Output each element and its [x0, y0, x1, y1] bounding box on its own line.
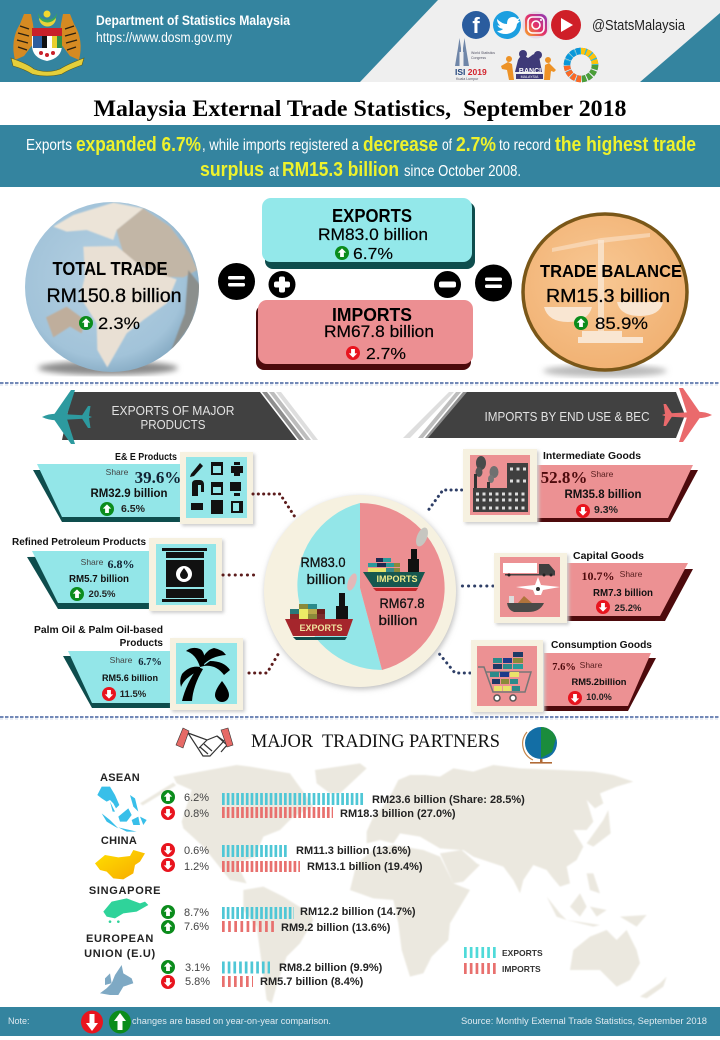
- banner text: at: [269, 163, 280, 180]
- partner: European Union: 5.8%: [185, 976, 210, 988]
- icon: export ship: [285, 572, 359, 640]
- pie label exports unit: billion: [306, 571, 346, 587]
- panel: consumption goods: 10.0%: [586, 692, 612, 702]
- background world map: [140, 763, 667, 1003]
- panel: capital goods: [494, 551, 693, 625]
- connector: intermediate dots: [427, 490, 467, 512]
- exports box: RM83.0 billion: [318, 225, 428, 244]
- banner text: [26, 134, 696, 181]
- panel: intermediate goods: 52.8%: [541, 468, 587, 487]
- panel: capital goods: 25.2%: [615, 603, 642, 614]
- chart: trade pie: [264, 495, 457, 689]
- logo: ISI 2019: Kuala Lumpur: [456, 77, 479, 81]
- legend: EXPORTS: [502, 948, 543, 958]
- exports header ribbon: EXPORTS OF MAJOR: [112, 404, 234, 418]
- panel: refined petroleum: Refined Petroleum Products: [12, 537, 146, 548]
- banner text: surplus: [200, 159, 264, 181]
- logo: SDG wheel: [567, 51, 595, 79]
- icon: truck, plane and ship: [494, 553, 569, 625]
- icon: facebook: [462, 11, 490, 39]
- total trade globe: [25, 202, 202, 375]
- imports header ribbon: [403, 388, 712, 442]
- icon: import ship: [363, 526, 430, 591]
- icon: balance scale: [544, 233, 663, 343]
- imports box: RM67.8 billion: [324, 322, 434, 341]
- exports box: EXPORTS: [332, 206, 412, 226]
- partner: Singapore: 7.6%: [184, 921, 209, 933]
- panel: intermediate goods: [463, 449, 698, 524]
- footer: [0, 1007, 720, 1036]
- panel: palm oil: Share: [110, 655, 133, 665]
- social handle: @StatsMalaysia: [592, 17, 686, 34]
- footer: Note:: [8, 1016, 30, 1026]
- icon: Singapore map: [103, 898, 148, 923]
- panel: refined petroleum: 20.5%: [89, 589, 116, 600]
- partner: ASEAN: 0.8%: [184, 808, 209, 820]
- partner: Singapore: [89, 885, 416, 934]
- icon: coat of arms: [11, 10, 84, 76]
- panel: palm oil: 6.7%: [138, 657, 162, 668]
- panel: intermediate goods: 9.3%: [594, 504, 619, 516]
- header band: [0, 0, 720, 82]
- section heading: major trading partners: MAJOR TRADING PARTNERS: [251, 731, 500, 752]
- operator: plus: [268, 271, 296, 298]
- panel: intermediate goods: Intermediate Goods: [543, 451, 641, 462]
- panel: E&E products: 6.5%: [121, 503, 146, 515]
- icon: instagram: [522, 12, 550, 38]
- panel: E&E products: 39.6%: [135, 468, 181, 487]
- icon: electronics grid: [180, 452, 255, 526]
- operator: minus: [434, 271, 461, 298]
- panel: palm oil: [34, 625, 245, 712]
- imports box: 2.7%: [366, 346, 406, 363]
- panel: capital goods: 10.7%: [582, 569, 614, 583]
- banner text: Exports: [26, 137, 72, 154]
- connector: consumption dots: [437, 651, 470, 673]
- logo: Banci Malaysia: BANCI: [519, 68, 541, 75]
- panel: consumption goods: [471, 640, 656, 714]
- trade balance circle: [523, 214, 687, 377]
- panel: consumption goods: RM5.2billion: [572, 677, 627, 688]
- panel: refined petroleum: [12, 537, 224, 613]
- panel: refined petroleum: RM5.7 billion: [69, 574, 129, 585]
- legend: IMPORTS: [502, 964, 541, 974]
- banner text: , while imports registered a: [202, 137, 359, 154]
- partner: European Union: 3.1%: [185, 962, 210, 974]
- partner: ASEAN: 6.2%: [184, 792, 209, 804]
- pie label exports: RM83.0: [300, 554, 346, 570]
- connector: petroleum dots: [223, 574, 257, 576]
- total trade text: RM150.8 billion: [46, 286, 182, 307]
- panel: E&E products: Share: [106, 467, 129, 477]
- panel: consumption goods: Consumption Goods: [551, 640, 652, 651]
- trade balance circle: RM15.3 billion: [546, 286, 670, 306]
- department name: Department of Statistics Malaysia: [96, 13, 290, 28]
- logo: ISI 2019: ISI 2019: [455, 67, 487, 77]
- footer: Source: Monthly External Trade Statistics, September 2018: [461, 1016, 707, 1026]
- logo: ISI 2019: World Statistics: [471, 51, 495, 55]
- panel: intermediate goods: RM35.8 billion: [564, 487, 642, 501]
- operator: equals right: [475, 264, 512, 302]
- partner: European Union: [84, 933, 383, 995]
- partner: ASEAN: [97, 772, 525, 832]
- partner: ASEAN: RM23.6 billion (Share: 28.5%): [372, 794, 525, 806]
- pie label imports unit: billion: [378, 612, 418, 628]
- panel: consumption goods: Share: [580, 660, 603, 670]
- panel: capital goods: RM7.3 billion: [593, 588, 653, 599]
- icon: factory: [463, 449, 539, 524]
- banner text: the highest trade: [555, 134, 696, 156]
- icon: red plane: [662, 388, 712, 442]
- partner: Singapore: SINGAPORE: [89, 885, 161, 897]
- exports box: 6.7%: [353, 246, 393, 263]
- icon: oil palm: [170, 638, 245, 712]
- partner: China: CHINA: [101, 835, 137, 847]
- total trade text: 2.3%: [98, 314, 140, 333]
- icon: teal plane: [42, 390, 92, 444]
- headline banner: [0, 125, 720, 187]
- panel: capital goods: Capital Goods: [573, 551, 644, 562]
- total trade text: [46, 259, 182, 333]
- icon: export ship: EXPORTS: [299, 623, 343, 633]
- partner: China: [95, 835, 423, 879]
- partner: European Union: UNION (E.U): [84, 948, 156, 960]
- panel: palm oil: RM5.6 billion: [102, 673, 158, 684]
- operator: equals left: [218, 263, 255, 300]
- partner: China: RM11.3 billion (13.6%): [296, 845, 411, 857]
- panel: palm oil: 11.5%: [120, 689, 147, 700]
- icon: ASEAN map: [97, 787, 147, 832]
- icon: oil barrel: [149, 538, 224, 613]
- logo: ISI 2019: Congress: [471, 56, 486, 60]
- trade balance circle: TRADE BALANCE: [540, 261, 682, 281]
- partner: Singapore: 8.7%: [184, 907, 209, 919]
- panel: E&E products: [33, 452, 255, 526]
- panel: E&E products: RM32.9 billion: [90, 486, 168, 500]
- exports header ribbon: [42, 390, 318, 444]
- banner text: RM15.3 billion: [282, 159, 399, 181]
- panel: refined petroleum: 6.8%: [108, 557, 134, 571]
- logo: Banci Malaysia: [501, 50, 556, 80]
- icon: handshake: [176, 728, 233, 756]
- icon: shopping cart: [471, 640, 545, 714]
- logo: ISI 2019: [455, 38, 495, 81]
- imports box: [256, 300, 473, 370]
- banner text: 2.7%: [456, 134, 496, 156]
- pie label imports: RM67.8: [380, 595, 425, 611]
- icon: import ship: IMPORTS: [376, 574, 418, 584]
- banner text: since October 2008.: [404, 163, 521, 180]
- partner: ASEAN: ASEAN: [100, 772, 140, 784]
- panel: consumption goods: 7.6%: [552, 662, 576, 673]
- partner: China: RM13.1 billion (19.4%): [307, 861, 423, 873]
- partner: Singapore: RM12.2 billion (14.7%): [300, 906, 416, 918]
- connector: palm dots: [249, 651, 280, 673]
- total trade text: TOTAL TRADE: [52, 259, 168, 279]
- partner: European Union: RM8.2 billion (9.9%): [279, 962, 383, 974]
- icon: China map: [95, 850, 145, 879]
- banner text: to record: [499, 137, 551, 154]
- icon: desk globe: [523, 727, 557, 764]
- icon: up arrow key: [109, 1010, 131, 1034]
- logo: Banci Malaysia: MALAYSIA: [521, 75, 539, 79]
- connector: capital dots: [458, 584, 493, 588]
- exports header ribbon: PRODUCTS: [140, 418, 206, 432]
- trade balance circle: 85.9%: [595, 314, 648, 333]
- connector: E&E dots: [253, 494, 295, 517]
- banner text: decrease: [363, 134, 438, 156]
- legend: [464, 948, 543, 974]
- icon: EU map: [100, 965, 133, 995]
- banner text: expanded 6.7%: [76, 134, 201, 156]
- partner: China: 1.2%: [184, 861, 209, 873]
- partner: ASEAN: RM18.3 billion (27.0%): [340, 808, 456, 820]
- partner: China: 0.6%: [184, 845, 209, 857]
- exports box: [262, 198, 475, 269]
- panel: palm oil: Palm Oil & Palm Oil-based: [34, 625, 163, 636]
- panel: palm oil: Products: [120, 638, 163, 649]
- panel: intermediate goods: Share: [591, 469, 614, 479]
- partner: Singapore: RM9.2 billion (13.6%): [281, 922, 391, 934]
- icon: down arrow key: [81, 1010, 103, 1034]
- panel: refined petroleum: Share: [81, 557, 104, 567]
- icon: twitter: [493, 11, 521, 39]
- partner: European Union: EUROPEAN: [86, 933, 154, 945]
- icon: youtube: [551, 10, 581, 40]
- title: Malaysia External Trade Statistics, September 2018: [94, 96, 626, 121]
- partner: European Union: RM5.7 billion (8.4%): [260, 976, 364, 988]
- imports box: IMPORTS: [332, 305, 412, 325]
- icon: facebook: f: [472, 13, 480, 38]
- panel: E&E products: E& E Products: [115, 452, 177, 463]
- website: https://www.dosm.gov.my: [96, 30, 232, 45]
- imports header ribbon: IMPORTS BY END USE & BEC: [484, 410, 650, 424]
- footer: changes are based on year-on-year comparison.: [132, 1016, 331, 1026]
- banner text: of: [442, 137, 453, 154]
- panel: capital goods: Share: [620, 569, 643, 579]
